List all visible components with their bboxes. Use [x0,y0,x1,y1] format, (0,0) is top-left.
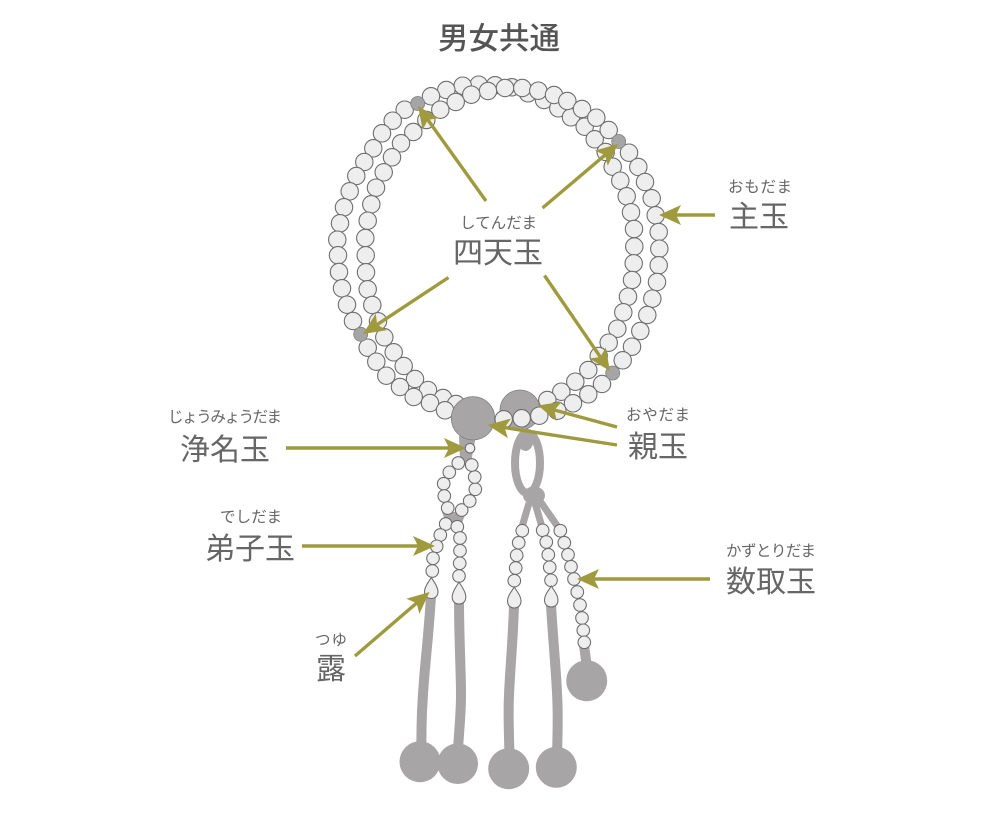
label: deshidama [205,509,295,566]
arrow: omodama [663,213,715,217]
label: omodama [728,178,792,234]
label: oyadama: おやだま [626,406,690,424]
label: deshidama: でしだま [220,509,282,526]
arrow: shitendama lower left [366,278,448,332]
arrow: shitendama upper right [542,147,615,208]
arrow: shitendama upper left [420,109,486,201]
shitendama gray beads [354,96,626,380]
label: kazutoridama [726,542,816,599]
label: tsuyu: 露 [316,653,346,686]
label: omodama: おもだま [728,178,792,196]
tassel balls [400,660,607,789]
label: kazutoridama: 数取玉 [726,566,816,599]
arrow: kazutoridama [581,577,710,581]
label: omodama: 主玉 [729,201,789,234]
front strand beads, right [496,79,668,419]
back strand beads, upper right [503,79,643,409]
arrow: tsuyu [355,595,426,656]
label: deshidama: 弟子玉 [205,533,295,566]
arrow: oyadama lower [492,426,617,445]
arrow: shitendama lower right [544,276,608,368]
label: shitendama: 四天玉 [453,237,543,270]
deshidama loop and strands [426,457,591,649]
label: tsuyu: つゆ [315,631,347,649]
cords [421,596,587,755]
label: oyadama [626,406,690,464]
tsuyu drop beads [424,578,558,608]
label: joumyoudama: 浄名玉 [180,434,270,467]
arrow: joumyoudama [286,446,462,450]
arrow: deshidama [302,544,431,548]
label: tsuyu [315,631,347,686]
outer strand beads, upper left [329,76,504,384]
label: shitendama [453,215,543,270]
oyadama right parent bead and cord loop [500,390,558,527]
arrow: oyadama upper [542,407,617,427]
inner strand beads, left [357,82,497,419]
joumyoudama small bead [465,444,475,453]
label: joumyoudama [168,409,282,467]
main bead ring [329,76,668,419]
joint of cords below the loop [442,512,466,523]
label: kazutoridama: かずとりだま [726,542,816,560]
front beads on oyadama [495,407,548,428]
label: oyadama: 親玉 [628,431,688,464]
oyadama left parent bead and stem [451,397,495,462]
label: shitendama: してんだま [460,215,537,232]
label: joumyoudama: じょうみょうだま [168,409,282,426]
title: 男女共通 [438,22,560,56]
